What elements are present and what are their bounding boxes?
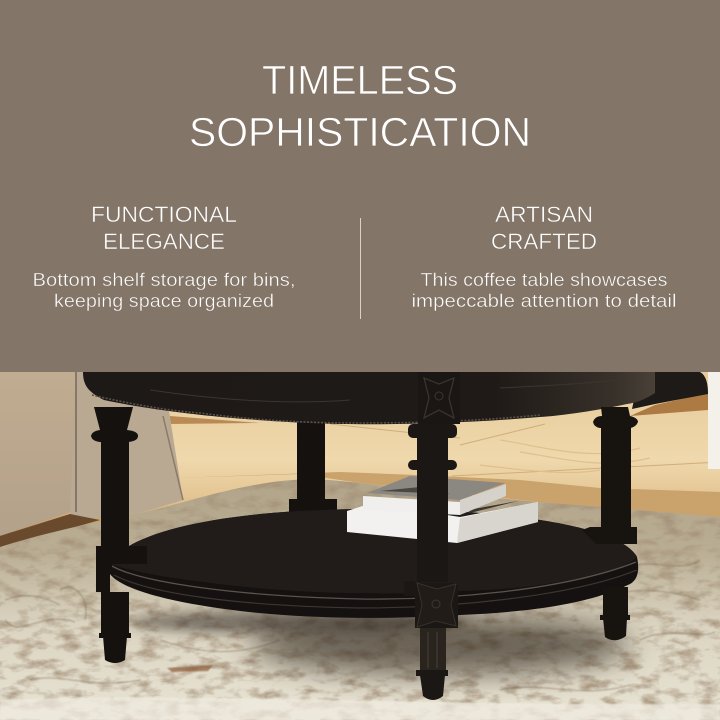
top book (367, 476, 505, 500)
divider (360, 218, 361, 319)
table top (83, 372, 655, 424)
feature: functional elegance (32, 202, 296, 311)
right leg (582, 407, 638, 640)
carved block (418, 372, 460, 424)
table shadow (250, 615, 630, 675)
text: artisan crafted description (412, 270, 676, 311)
heading: artisan crafted (491, 202, 597, 254)
text: artisan crafted description: impeccable attention to detail (412, 291, 676, 311)
rug veins (5, 560, 715, 691)
photo: coffee table in living room (0, 372, 720, 720)
title (189, 57, 531, 155)
heading: artisan crafted: ARTISAN (495, 202, 593, 227)
text: functional elegance description (32, 270, 296, 311)
books (347, 476, 538, 543)
bottom book (347, 502, 538, 543)
title: TIMELESS (262, 57, 458, 103)
title: SOPHISTICATION (189, 109, 531, 155)
rug (0, 470, 720, 720)
text: functional elegance description: Bottom shelf storage for bins, (32, 270, 296, 290)
text: artisan crafted description: This coffee table showcases (420, 270, 668, 290)
sofa (0, 372, 183, 548)
left leg (91, 407, 147, 663)
heading: functional elegance: ELEGANCE (103, 229, 225, 254)
floor (0, 372, 720, 532)
panel: heading background (0, 0, 720, 372)
white wall trim at right (708, 372, 720, 469)
feature: artisan crafted (412, 202, 676, 311)
heading: functional elegance: FUNCTIONAL (91, 202, 237, 227)
heading: functional elegance (91, 202, 237, 254)
heading: artisan crafted: CRAFTED (491, 229, 597, 254)
text: functional elegance description: keeping space organized (54, 291, 274, 311)
front leg (404, 424, 458, 700)
lower shelf (110, 509, 638, 618)
back leg (289, 420, 337, 516)
dark sofa at right (632, 372, 708, 409)
